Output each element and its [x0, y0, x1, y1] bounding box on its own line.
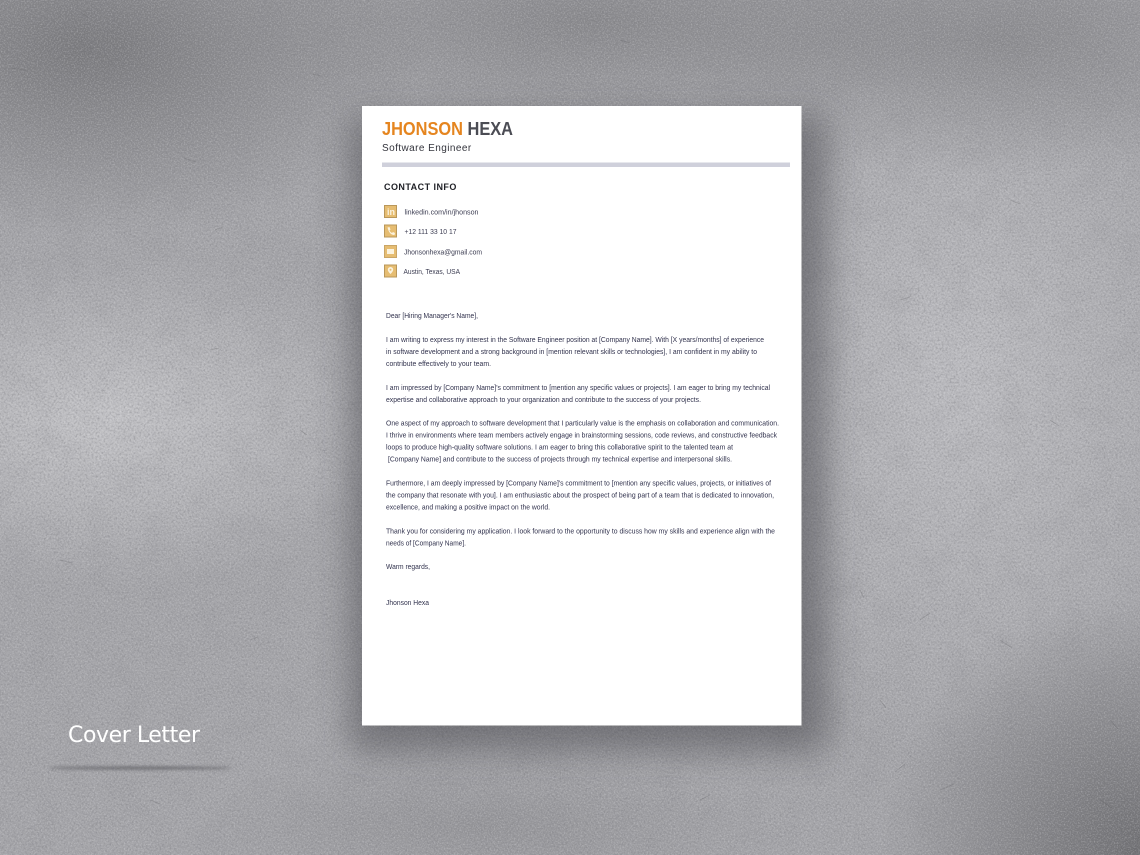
contact heading: CONTACT INFO [384, 182, 457, 192]
paragraph 1: in software development and a strong background in [mention relevant skills or technologies], I am confident in my ability to [386, 349, 757, 356]
contact row: phone: +12 111 33 10 17 [404, 229, 457, 236]
paragraph 3: loops to produce high-quality software solutions. I am eager to bring this collaborative spirit to the talented team at [386, 444, 733, 452]
paragraph 2: expertise and collaborative approach to your organization and contribute to the success of your projects. [386, 397, 701, 404]
contact row: phone [384, 225, 457, 237]
contact row: linkedin: linkedin.com/in/jhonson [404, 210, 479, 216]
closing: Warm regards, [386, 564, 430, 571]
letter body [386, 313, 779, 607]
contact row: email [384, 246, 482, 258]
paragraph 4: the company that resonate with you]. I am enthusiastic about the prospect of being part of a team that is dedicated to innovation, [386, 492, 774, 500]
contact row: address: Austin, Texas, USA [404, 269, 460, 276]
paragraph 3: I thrive in environments where team members actively engage in brainstorming sessions, code reviews, and constructive feedback [386, 432, 777, 440]
name heading: JHONSON HEXA [382, 118, 513, 139]
contact row: email: Jhonsonhexa@gmail.com [404, 250, 482, 256]
paragraph 5: needs of [Company Name]. [386, 540, 466, 548]
icon: linkedin: in [387, 207, 395, 217]
caption underline shadow [48, 766, 232, 770]
paragraph 1: I am writing to express my interest in the Software Engineer position at [Company Name]. With [X years/months] of experience [386, 337, 764, 344]
paragraph 4: Furthermore, I am deeply impressed by [Company Name]'s commitment to [mention any specific values, projects, or initiatives of [386, 480, 771, 488]
salutation: Dear [Hiring Manager's Name], [386, 313, 478, 320]
paragraph 1: contribute effectively to your team. [386, 361, 491, 368]
paragraph 3 [386, 420, 779, 464]
paragraph 2 [386, 385, 770, 404]
page shadow [350, 116, 828, 752]
paragraph 3: One aspect of my approach to software development that I particularly value is the emphasis on collaboration and communication. [386, 420, 779, 428]
cover letter page [362, 106, 802, 726]
paragraph 4: excellence, and making a positive impact on the world. [386, 504, 550, 512]
caption: Cover Letter: Cover Letter [68, 723, 201, 748]
paragraph 5: Thank you for considering my application. I look forward to the opportunity to discuss how my skills and experience align with the [386, 528, 775, 536]
paragraph 1 [386, 337, 764, 368]
job title: Software Engineer [382, 143, 472, 154]
header rule [382, 162, 790, 167]
icon: envelope [384, 246, 396, 258]
icon: phone [384, 225, 396, 237]
paragraph 2: I am impressed by [Company Name]'s commitment to [mention any specific values or projects]. I am eager to bring my technical [386, 385, 770, 392]
contact row: address [384, 265, 460, 277]
paragraph 3: [Company Name] and contribute to the success of projects through my technical expertise and interpersonal skills. [388, 456, 732, 464]
contact row: linkedin [384, 206, 479, 218]
signature: Jhonson Hexa [386, 600, 429, 607]
paragraph 4 [386, 480, 774, 512]
paragraph 5 [386, 528, 775, 548]
icon: location pin [384, 265, 396, 277]
